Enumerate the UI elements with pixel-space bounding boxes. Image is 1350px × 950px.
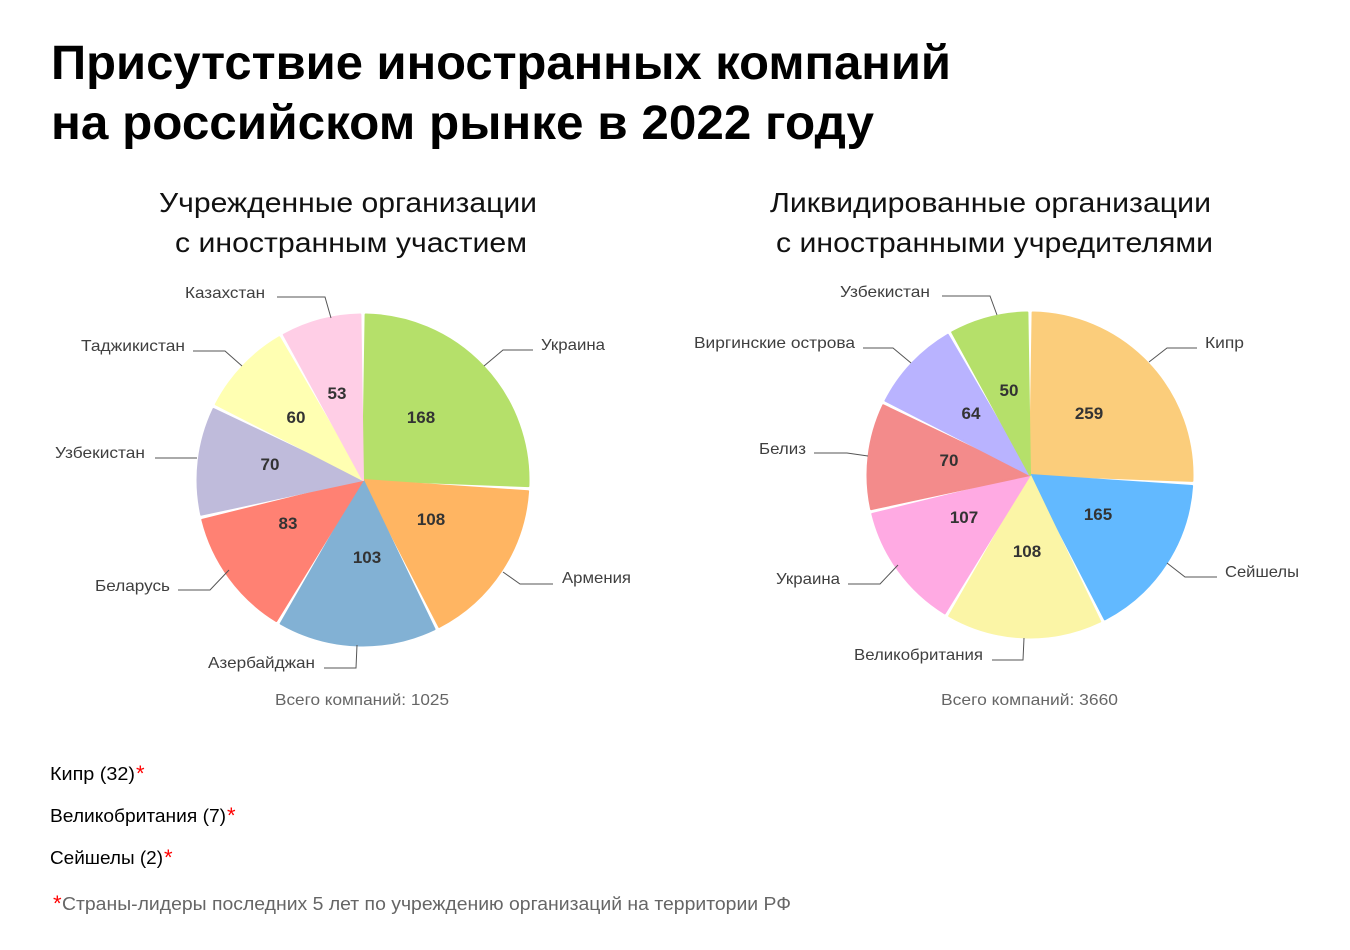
heading: founded organizations <box>159 187 537 258</box>
slice: Belize 70 <box>867 405 1030 509</box>
pie chart: liquidated organizations <box>694 284 1299 664</box>
slice: Ukraine 168 <box>363 314 529 486</box>
value labels: 83 <box>279 514 297 533</box>
heading: liquidated organizations <box>770 187 1213 258</box>
slice: Belarus 83 <box>202 480 363 621</box>
slice: Virgin Islands 64 <box>886 335 1030 475</box>
country labels: Украина <box>776 571 840 588</box>
leader lines <box>814 296 1217 660</box>
value labels: 64 <box>962 404 981 423</box>
footnote: Страны-лидеры последних 5 лет по учреждению организаций на территории РФ <box>62 894 791 914</box>
value labels: 165 <box>1084 505 1112 524</box>
value labels: 103 <box>353 548 381 567</box>
value labels: 50 <box>1000 381 1018 400</box>
slice: Great Britain 108 <box>949 475 1100 637</box>
country labels <box>694 284 1299 664</box>
value labels: 108 <box>1013 542 1041 561</box>
slice: Uzbekistan 50 <box>952 312 1030 475</box>
list: leading countries: * <box>227 803 236 828</box>
country labels: Сейшелы <box>1225 564 1299 581</box>
country labels: Узбекистан <box>840 284 930 301</box>
country labels: Азербайджан <box>208 655 315 672</box>
country labels: Белиз <box>759 441 806 458</box>
country labels: Таджикистан <box>81 338 185 355</box>
list: leading countries: * <box>136 761 145 786</box>
value labels: 53 <box>328 384 346 403</box>
list: leading countries: Кипр (32) <box>50 764 135 784</box>
value labels: 70 <box>261 455 279 474</box>
leader lines <box>155 297 553 668</box>
country labels: Кипр <box>1205 335 1244 352</box>
country labels: Виргинские острова <box>694 335 855 352</box>
value labels: 60 <box>287 408 305 427</box>
value labels <box>940 381 1112 561</box>
slice: Uzbekistan 70 <box>198 409 363 515</box>
country labels: Великобритания <box>854 647 983 664</box>
country labels: Беларусь <box>95 578 170 595</box>
country labels <box>55 285 631 672</box>
value labels: 107 <box>950 508 978 527</box>
value labels: 108 <box>417 510 445 529</box>
country labels: Казахстан <box>185 285 265 302</box>
heading: liquidated organizations: с иностранными учредителями <box>776 227 1213 258</box>
total: founded companies: Всего компаний: 1025 <box>275 692 449 709</box>
slice: Cyprus 259 <box>1030 312 1193 481</box>
heading: liquidated organizations: Ликвидированные организации <box>770 187 1211 218</box>
list: leading countries: Великобритания (7) <box>50 806 226 826</box>
slice: Ukraine 107 <box>872 475 1030 613</box>
list: leading countries: Сейшелы (2) <box>50 848 163 868</box>
title: Присутствие иностранных компаний <box>51 37 951 90</box>
slice: Tajikistan 60 <box>216 337 363 480</box>
heading: founded organizations: Учрежденные организации <box>159 187 537 218</box>
heading: founded organizations: с иностранным участием <box>175 227 527 258</box>
list: leading countries <box>50 761 236 870</box>
slice: Azerbaijan 103 <box>281 480 434 645</box>
value labels <box>261 384 445 567</box>
slice: Seychelles 165 <box>1030 475 1192 619</box>
value labels: 259 <box>1075 404 1103 423</box>
list: leading countries: * <box>164 845 173 870</box>
country labels: Узбекистан <box>55 445 145 462</box>
value labels: 70 <box>940 451 958 470</box>
slice: Armenia 108 <box>363 480 528 627</box>
value labels: 168 <box>407 408 435 427</box>
title <box>51 37 951 150</box>
slice: Kazakhstan 53 <box>284 314 363 480</box>
country labels: Армения <box>562 570 631 587</box>
total: liquidated companies: Всего компаний: 3660 <box>941 692 1118 709</box>
title: на российском рынке в 2022 году <box>51 97 874 150</box>
country labels: Украина <box>541 337 605 354</box>
pie chart: founded organizations <box>55 285 631 672</box>
footnote: * <box>53 891 62 916</box>
